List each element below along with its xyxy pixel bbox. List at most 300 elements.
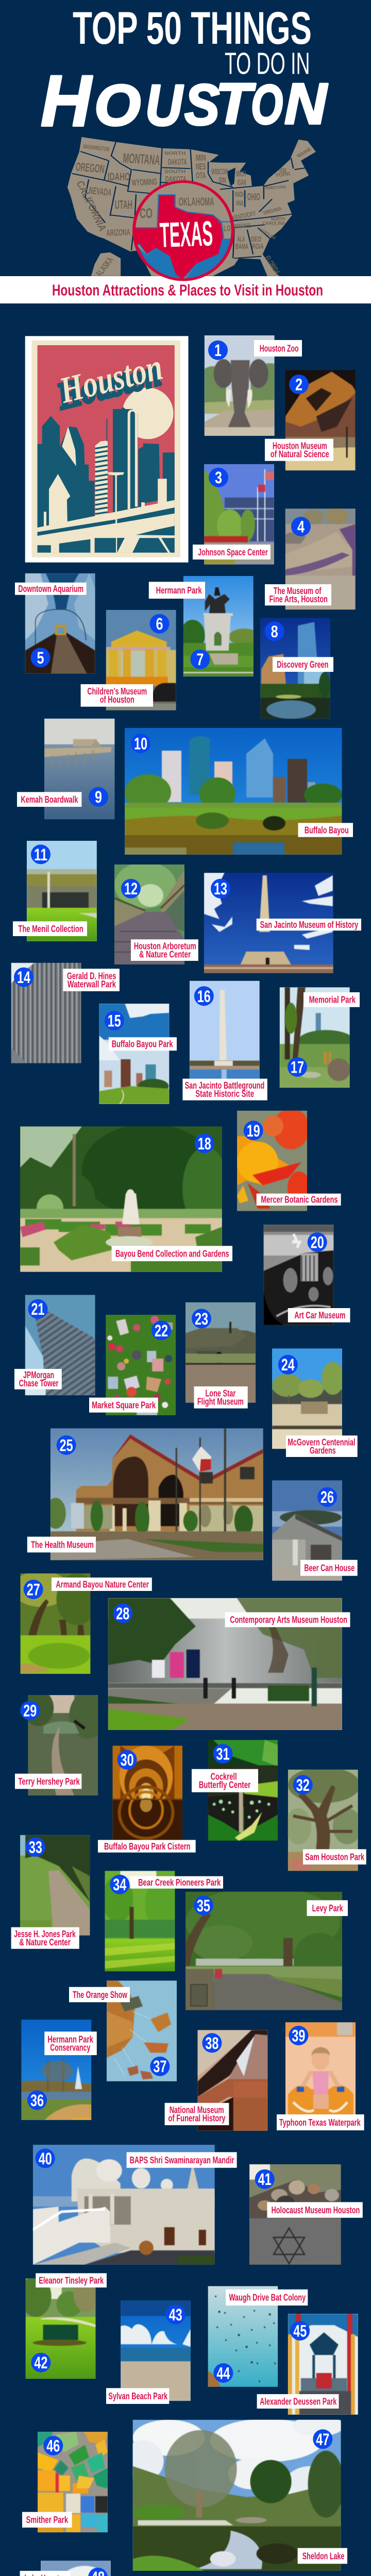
label [15, 583, 87, 595]
label: Art Car Museum [294, 1310, 345, 1320]
map of the United States: YORK [275, 170, 291, 178]
label: Conservancy [50, 2042, 90, 2053]
label: The Museum of [274, 586, 322, 596]
label [193, 545, 271, 560]
number badge: 46 [46, 2437, 60, 2455]
label: Waugh Drive Bat Colony [229, 2293, 306, 2303]
panel: 22 Market Square Park [89, 1315, 176, 1415]
map of the United States: ALA [237, 235, 245, 243]
number badge: 25 [60, 1436, 73, 1455]
label: JPMorgan [23, 1370, 54, 1380]
label [298, 823, 353, 837]
panel: 18 Bayou Bend Collection and Gardens [18, 1124, 232, 1272]
panel: 33 Jesse H. Jones Park [11, 1835, 90, 1949]
panel: 3 Johnson Space Center [193, 464, 274, 565]
label [13, 921, 87, 936]
map of the United States: MONTANA [122, 150, 161, 168]
label: Gardens [310, 1446, 336, 1456]
panel: 48 Lake Houston [20, 2561, 113, 2576]
number badge [149, 614, 169, 634]
number badge: 13 [214, 879, 227, 898]
panel: 24 McGovern Centennial Gardens [272, 1348, 358, 1457]
label: Discovery Green [277, 659, 328, 670]
number badge: 3 [215, 468, 222, 487]
panel: 35 Levy Park [185, 1887, 348, 2010]
label [14, 1369, 62, 1389]
number badge: 1 [214, 341, 222, 360]
map of the United States: GEO [251, 235, 261, 243]
title: TO DO IN [225, 46, 310, 80]
number badge [89, 787, 108, 807]
label [44, 2031, 97, 2055]
label: Mercer Botanic Gardens [261, 1195, 338, 1205]
panel: 7 Hermann Park [149, 576, 260, 676]
label [20, 2571, 71, 2576]
panel: 46 Smither Park [22, 2432, 108, 2533]
number badge: 26 [321, 1488, 334, 1506]
panel: 5 Downtown Aquarium [15, 573, 95, 674]
panel: 13 San Jacinto Museum of History [204, 873, 361, 973]
number badge: 45 [293, 2321, 307, 2340]
photo: cistern arches [112, 1745, 182, 1840]
label: Buffalo Bayou [305, 825, 349, 835]
map of the United States: ALASKA [93, 256, 115, 278]
photo: Sam Houston statue [183, 576, 254, 676]
photo: white marble temple [33, 2145, 215, 2265]
map of the United States: IGAN [237, 178, 246, 187]
label: Cockrell [211, 1771, 237, 1782]
number badge: 38 [205, 2034, 218, 2053]
label: of Natural Science [271, 449, 329, 460]
number badge: 28 [116, 1604, 129, 1623]
label [298, 2548, 347, 2564]
photo: bats in teal sky [208, 2286, 278, 2387]
label [307, 1900, 348, 1916]
label [22, 2512, 72, 2528]
label [300, 1560, 358, 1576]
label [106, 2388, 169, 2404]
map of the United States: WYOMING [131, 177, 158, 188]
label: The Menil Collection [18, 924, 83, 934]
number badge: 41 [258, 2170, 272, 2189]
panel: 39 Typhoon Texas Waterpark [277, 2022, 364, 2130]
label: The Orange Show [73, 1990, 128, 2000]
label [277, 2114, 364, 2130]
label: Houston Arboretum [134, 941, 196, 951]
Texas badge: LO [224, 224, 231, 233]
number badge: 18 [198, 1134, 211, 1153]
panel: 31 Cockrell Butterfly Center [192, 1740, 278, 1841]
label: Terry Hershey Park [18, 1776, 80, 1787]
map of the United States: WISCON [211, 167, 228, 176]
label [182, 1079, 267, 1100]
photo: elephant [204, 335, 275, 436]
photo: B-17 bomber [185, 1302, 256, 1403]
Houston retro poster: Houston [53, 352, 164, 417]
panel: 40 BAPS Shri Swaminarayan Mandir [33, 2145, 237, 2265]
Texas badge: TEXAS [159, 214, 213, 255]
panel: 38 National Museum of Funeral History [165, 2030, 267, 2131]
number badge [289, 375, 309, 394]
label [81, 684, 153, 707]
panel: 6 Children's Museum of Houston [81, 610, 176, 710]
number badge: 23 [195, 1310, 208, 1328]
panel: 41 Holocaust Museum Houston [249, 2164, 363, 2265]
label [288, 1308, 350, 1323]
label [69, 1987, 130, 2002]
map of the United States: OHIO [247, 192, 260, 202]
label [273, 657, 333, 672]
photo: pointillist painting [285, 509, 356, 610]
number badge: 33 [29, 1838, 42, 1857]
photo: lake with clouds [123, 2416, 344, 2571]
photo: towers over pond [260, 618, 330, 719]
label: Jesse H. Jones Park [14, 1929, 76, 1939]
label: Buffalo Bayou Park [112, 1039, 173, 1049]
photo: downtown skyline [125, 728, 342, 855]
panel: 30 Buffalo Bayou Park Cistern [98, 1745, 196, 1853]
photo: boardwalk through trees [114, 865, 184, 964]
label: & Nature Center [19, 1937, 71, 1947]
photo: stainless museum [108, 1598, 342, 1730]
panel: 2 Houston Museum of Natural Science [265, 370, 356, 470]
title: T [215, 72, 256, 136]
label [52, 1578, 152, 1591]
photo: flags at Space Center [204, 464, 274, 565]
photo: bright green park [105, 1871, 175, 1971]
photo: butterfly on leaves [208, 1740, 278, 1841]
map of the United States: NORTH [271, 217, 285, 222]
Houston retro poster: Houston [55, 346, 166, 411]
number badge: 20 [311, 1233, 324, 1252]
Houston retro poster [25, 336, 188, 563]
label [257, 1194, 341, 1206]
label [265, 584, 331, 605]
title: U [145, 73, 184, 138]
map of the United States: ARIZONA [106, 228, 131, 239]
label: Houston Zoo [260, 343, 299, 353]
photo: park sign [21, 2276, 99, 2379]
title: S [184, 73, 220, 137]
map of the United States: CAROLINA [258, 228, 277, 241]
photo: shaded path [185, 1892, 342, 2010]
label: of Funeral History [168, 2113, 226, 2124]
map of the United States: ANA [236, 199, 244, 207]
number badge: 6 [156, 615, 163, 633]
label: Gerald D. Hines [67, 971, 116, 981]
photo: oaks on bright lawn [21, 1573, 91, 1674]
number badge: 42 [34, 2353, 47, 2372]
label: Kemah Boardwalk [21, 794, 78, 805]
label [63, 969, 120, 991]
label [131, 939, 198, 961]
panel: 21 JPMorgan Chase Tower [14, 1295, 95, 1395]
label [192, 1769, 258, 1792]
photo: park and skyline [99, 1004, 169, 1104]
number badge: 4 [297, 517, 305, 536]
photo: orange flower [237, 1111, 307, 1211]
panel: 23 Lone Star Flight Museum [185, 1302, 256, 1409]
map of the United States: NNESSEE [234, 222, 251, 229]
title: N [284, 72, 328, 136]
label [89, 1398, 158, 1413]
number badge [208, 341, 228, 360]
title: O [251, 73, 283, 135]
map of the United States: OREGON [75, 160, 105, 176]
panel: 19 Mercer Botanic Gardens [237, 1108, 341, 1211]
map of the United States: MIN [196, 153, 206, 163]
panel: 32 Sam Houston Park [285, 1767, 366, 1871]
title: O [94, 73, 141, 138]
label: Market Square Park [92, 1400, 156, 1411]
map of the United States [68, 137, 316, 278]
map of the United States: BAMA [235, 242, 248, 251]
panel: 17 Memorial Park [280, 987, 360, 1088]
number badge: 30 [121, 1751, 134, 1769]
panel: 1 Houston Zoo [205, 335, 302, 436]
label: Butterfly Center [199, 1780, 250, 1790]
number badge: 5 [37, 649, 44, 667]
photo: child on slide [285, 2022, 356, 2114]
photo: gardens entry [272, 1348, 342, 1449]
panel: 8 Discovery Green [260, 618, 333, 719]
number badge: 22 [155, 1321, 168, 1340]
map of the United States: NEVADA [89, 185, 112, 198]
map of the United States: DAKOTA [168, 158, 187, 166]
subtitle band [0, 276, 371, 303]
map of the United States: MICH [236, 169, 246, 178]
map of the United States: OTA [196, 171, 206, 181]
number badge: 27 [27, 1581, 40, 1599]
label: Hermann Park [156, 585, 202, 596]
label [11, 1927, 79, 1949]
number badge: 8 [271, 622, 278, 641]
photo: lake treeline [41, 2561, 113, 2576]
label: Sylvan Beach Park [108, 2391, 168, 2401]
number badge: 12 [124, 879, 138, 898]
label: BAPS Shri Swaminarayan Mandir [130, 2155, 234, 2165]
photo: boardwalk path [20, 1835, 90, 1936]
panel: 42 Eleanor Tinsley Park [21, 2273, 107, 2379]
number badge: 32 [296, 1776, 310, 1794]
photo: playground [288, 2314, 358, 2415]
number badge: 31 [216, 1744, 230, 1763]
map of the United States: MAINE [296, 147, 313, 159]
title: H [41, 60, 93, 141]
label [36, 2273, 107, 2287]
number badge: 44 [216, 2364, 230, 2382]
photo: casket detail [197, 2030, 268, 2131]
photo: Memorial Park [279, 987, 350, 1088]
map of the United States: SIN [219, 176, 226, 185]
panel: 45 Alexander Deussen Park [257, 2314, 358, 2415]
label: & Nature Center [139, 949, 191, 959]
panel: 28 Contemporary Arts Museum Houston [108, 1598, 350, 1731]
label: Smither Park [26, 2515, 69, 2525]
label [225, 1612, 350, 1627]
photo: brick museum [50, 1428, 263, 1560]
panel: 4 The Museum of Fine Arts [265, 507, 356, 609]
label: Bayou Bend Collection and Gardens [115, 1249, 229, 1259]
map of the United States: CAROLINA [263, 221, 285, 226]
number badge: 14 [17, 968, 30, 987]
label: Fine Arts, Houston [269, 594, 328, 604]
number badge: 2 [295, 375, 302, 394]
number badge [31, 648, 50, 667]
photo: beach [121, 2300, 191, 2401]
panel: 26 Beer Can House [272, 1480, 358, 1581]
label: Houston Museum [273, 441, 327, 451]
number badge: 10 [134, 735, 147, 753]
number badge: 16 [197, 987, 211, 1006]
map of the United States: UTAH [115, 198, 132, 212]
number badge: 7 [196, 650, 204, 669]
label [257, 2394, 339, 2409]
photo: San Jacinto Monument [204, 873, 333, 973]
map of the United States: PENNSYLVANIA [265, 184, 286, 191]
photo: black and white car [264, 1225, 334, 1325]
photo: can-clad house [272, 1480, 342, 1581]
label [194, 1386, 248, 1409]
photo: swing ride [107, 1980, 177, 2081]
panel: 16 San Jacinto Battleground [182, 981, 267, 1100]
photo: Children's Museum [106, 610, 176, 710]
label [286, 1435, 358, 1457]
number badge: 36 [30, 2091, 44, 2110]
photo: mosaic wall [38, 2432, 108, 2533]
number badge: 29 [23, 1701, 37, 1720]
number badge: 34 [113, 1875, 126, 1894]
label: Buffalo Bayou Park Cistern [104, 1841, 191, 1852]
label [17, 792, 81, 807]
photo: waterwall [11, 962, 81, 1063]
label [267, 2202, 363, 2218]
photo: formal gardens with statue [20, 1126, 222, 1272]
photo: pier over water [44, 718, 114, 819]
panel: 9 Kemah Boardwalk [17, 719, 115, 820]
number badge [209, 468, 228, 487]
photo: aerial picnic crowd [106, 1315, 176, 1415]
label [109, 1037, 177, 1050]
number badge: 40 [39, 2149, 52, 2168]
label: Chase Tower [19, 1378, 58, 1388]
label: Downtown Aquarium [18, 584, 83, 594]
number badge: 47 [316, 2430, 329, 2449]
label: Lone Star [205, 1388, 235, 1399]
panel: 12 Houston Arboretum [114, 862, 198, 964]
map of the United States: SOUTH [164, 169, 185, 175]
label: Johnson Space Center [198, 547, 268, 557]
number badge: 21 [31, 1300, 44, 1318]
label: The Health Museum [31, 1539, 94, 1550]
number badge: 37 [153, 2057, 166, 2076]
map of the United States: FLORIDA [262, 255, 281, 276]
map of the United States: VIRGINIA [262, 206, 283, 216]
panel: 36 Hermann Park Conservancy [21, 2020, 97, 2120]
panel: 29 Terry Hershey Park [15, 1690, 105, 1795]
map of the United States: RGIA [252, 242, 264, 251]
label: Flight Museum [197, 1397, 244, 1407]
photo: stones and star [249, 2164, 341, 2265]
label [226, 2290, 308, 2306]
panel: 14 Gerald D. Hines Waterwall Park [11, 963, 120, 1063]
label [303, 992, 360, 1007]
photo: tower from below [25, 1295, 95, 1395]
number badge: 9 [95, 788, 102, 806]
map of the United States: KENTUCKY [231, 210, 257, 222]
label [112, 1246, 232, 1261]
number badge: 19 [247, 1122, 260, 1140]
panel: 44 Waugh Drive Bat Colony [208, 2286, 308, 2387]
label: Armand Bayou Nature Center [56, 1579, 149, 1589]
panel: 37 The Orange Show [69, 1980, 177, 2081]
map of the United States: INDI [235, 190, 244, 199]
map of the United States: NES [196, 162, 206, 172]
title [41, 2, 328, 141]
number badge: 43 [169, 2306, 182, 2324]
label: Sheldon Lake [302, 2551, 344, 2561]
label [27, 1537, 96, 1552]
label [303, 1849, 366, 1865]
label: San Jacinto Battleground [185, 1080, 264, 1091]
label [127, 2152, 237, 2168]
label: Hermann Park [47, 2034, 94, 2044]
number badge: 15 [108, 1012, 121, 1030]
number badge: 39 [292, 2027, 305, 2045]
label: Bear Creek Pioneers Park [138, 1877, 221, 1888]
number badge: 24 [281, 1355, 295, 1374]
photo: dirt trail [28, 1695, 98, 1795]
panel: 34 Bear Creek Pioneers Park [102, 1871, 223, 1971]
panel: 15 Buffalo Bayou Park [99, 1004, 177, 1104]
map of the United States: DAKOTA [165, 175, 187, 183]
label: Eleanor Tinsley Park [39, 2275, 104, 2285]
panel: 20 Art Car Museum [264, 1225, 350, 1325]
label [15, 1774, 81, 1789]
photo: T. rex skull [285, 370, 356, 471]
photo: Menil building [27, 841, 97, 941]
label [130, 1876, 223, 1889]
panel: 25 The Health Museum [27, 1428, 263, 1560]
map of the United States: NORTH [164, 150, 185, 156]
number badge [190, 650, 210, 669]
label: Waterwall Park [68, 979, 116, 989]
label [265, 439, 333, 461]
label: Children's Museum [87, 686, 147, 697]
Texas badge: CO [140, 206, 153, 221]
photo: obelisk and reflecting pool [190, 981, 260, 1079]
panel: 47 Sheldon Lake [123, 2416, 347, 2571]
label: of Houston [100, 694, 134, 705]
map of the United States: CALIFORNIA [74, 180, 108, 233]
Texas badge: OKLAHOMA [179, 196, 214, 208]
map of the United States: WASHINGTON [82, 143, 110, 152]
panel: 43 Sylvan Beach Park [106, 2300, 191, 2404]
map of the United States: NEW [279, 167, 286, 174]
label: Alexander Deussen Park [260, 2396, 337, 2406]
label: National Museum [170, 2105, 224, 2115]
label: State Historic Site [195, 1089, 254, 1099]
photo: live oak [288, 1769, 358, 1871]
Texas badge [132, 180, 234, 281]
label [165, 2103, 229, 2125]
number badge: 17 [291, 1058, 304, 1077]
label: Levy Park [312, 1903, 343, 1913]
panel: 27 Armand Bayou Nature Center [12, 1571, 152, 1674]
number badge [265, 621, 284, 641]
number badge: 11 [34, 845, 47, 864]
number badge [291, 517, 311, 536]
